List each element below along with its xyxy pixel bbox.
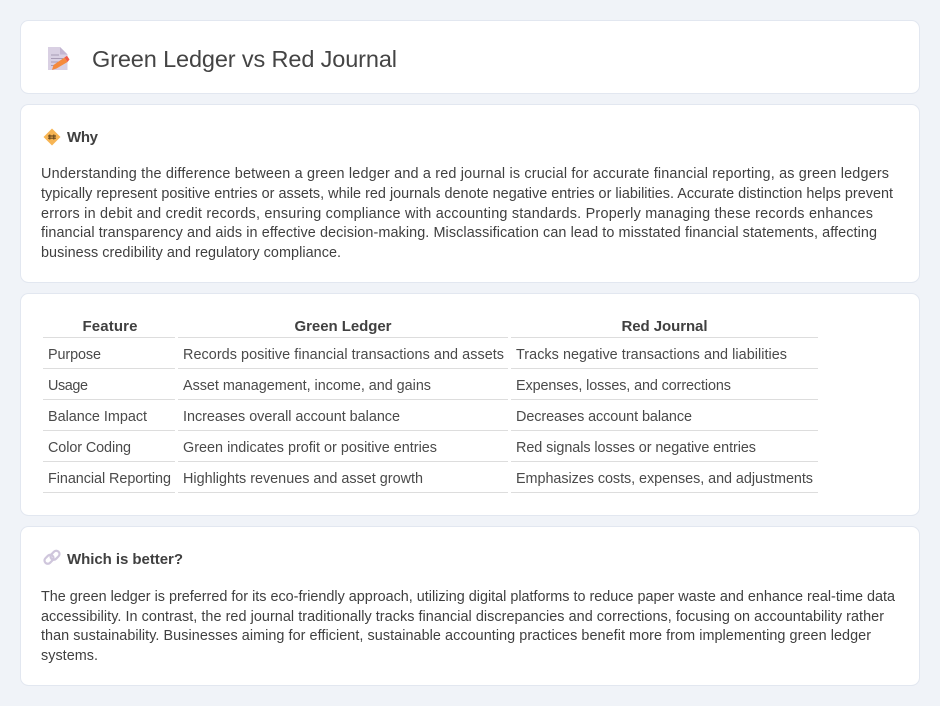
- row: financial reporting: Financial Reporting: [48, 471, 171, 487]
- icon: diamond warning sign: [44, 128, 60, 146]
- icon: document with pencil: [48, 47, 70, 70]
- table header: [82, 318, 708, 335]
- row: color coding: Color Coding: [48, 440, 131, 456]
- text block: why explanation: business credibility and regulatory compliance.: [41, 245, 341, 261]
- row: color coding: Red signals losses or negative entries: [516, 440, 756, 456]
- row: usage: [48, 378, 731, 394]
- table row lines: [43, 338, 818, 492]
- text block: why explanation: Understanding the difference between a green ledger and a red journal is crucial for accurate financial reporting, as green ledgers: [41, 166, 889, 182]
- title: Green Ledger vs Red Journal: [92, 46, 397, 72]
- row: usage: Expenses, losses, and corrections: [516, 378, 731, 394]
- row: financial reporting: Highlights revenues and asset growth: [183, 471, 423, 487]
- row: usage: Usage: [48, 378, 88, 394]
- row: financial reporting: [48, 471, 813, 487]
- row: balance impact: Decreases account balance: [516, 409, 692, 425]
- row: purpose: Records positive financial transactions and assets: [183, 347, 504, 363]
- text block: which is better explanation: systems.: [41, 648, 98, 664]
- row: purpose: [48, 347, 787, 363]
- text block: why explanation: financial transparency and aids in effective decision-making. Misclassification can lead to misstated financial statements, affecting: [41, 225, 877, 241]
- text block: why explanation: errors in debit and credit records, ensuring compliance with accounting standards. Properly managing these records enhances: [41, 206, 873, 222]
- panel: why: [20, 104, 920, 282]
- text block: why explanation: [41, 166, 893, 261]
- table header: Red Journal: [622, 318, 708, 335]
- row: purpose: Tracks negative transactions and liabilities: [516, 347, 787, 363]
- panel: which is better: [20, 526, 920, 686]
- heading: why: Why: [67, 129, 99, 146]
- row: balance impact: [48, 409, 692, 425]
- row: color coding: Green indicates profit or positive entries: [183, 440, 437, 456]
- icon: chain link: [43, 549, 61, 565]
- row: usage: Asset management, income, and gains: [183, 378, 431, 394]
- text block: which is better explanation: [41, 589, 895, 664]
- text block: which is better explanation: than sustainability. Businesses aiming for efficient, sustainable accounting practices benefit more from implementing green ledger: [41, 628, 871, 644]
- row: balance impact: Balance Impact: [48, 409, 147, 425]
- table header: Feature: [82, 318, 138, 335]
- row: color coding: [48, 440, 756, 456]
- text block: why explanation: typically represent positive entries or assets, while red journals denote negative entries or liabilities. Accurate distinction helps prevent: [41, 186, 893, 202]
- heading: which is better: Which is better?: [67, 551, 183, 568]
- table header: Green Ledger: [294, 318, 392, 335]
- row: purpose: Purpose: [48, 347, 101, 363]
- text block: which is better explanation: The green ledger is preferred for its eco-friendly approach, utilizing digital platforms to reduce paper waste and enhance real-time data: [41, 589, 895, 605]
- text block: which is better explanation: accessibility. In contrast, the red journal traditionally tracks financial discrepancies and corrections, focusing on accountability rather: [41, 609, 884, 625]
- panel: header: [20, 20, 920, 94]
- panel: comparison table: [20, 294, 920, 516]
- row: balance impact: Increases overall account balance: [183, 409, 400, 425]
- row: financial reporting: Emphasizes costs, expenses, and adjustments: [516, 471, 813, 487]
